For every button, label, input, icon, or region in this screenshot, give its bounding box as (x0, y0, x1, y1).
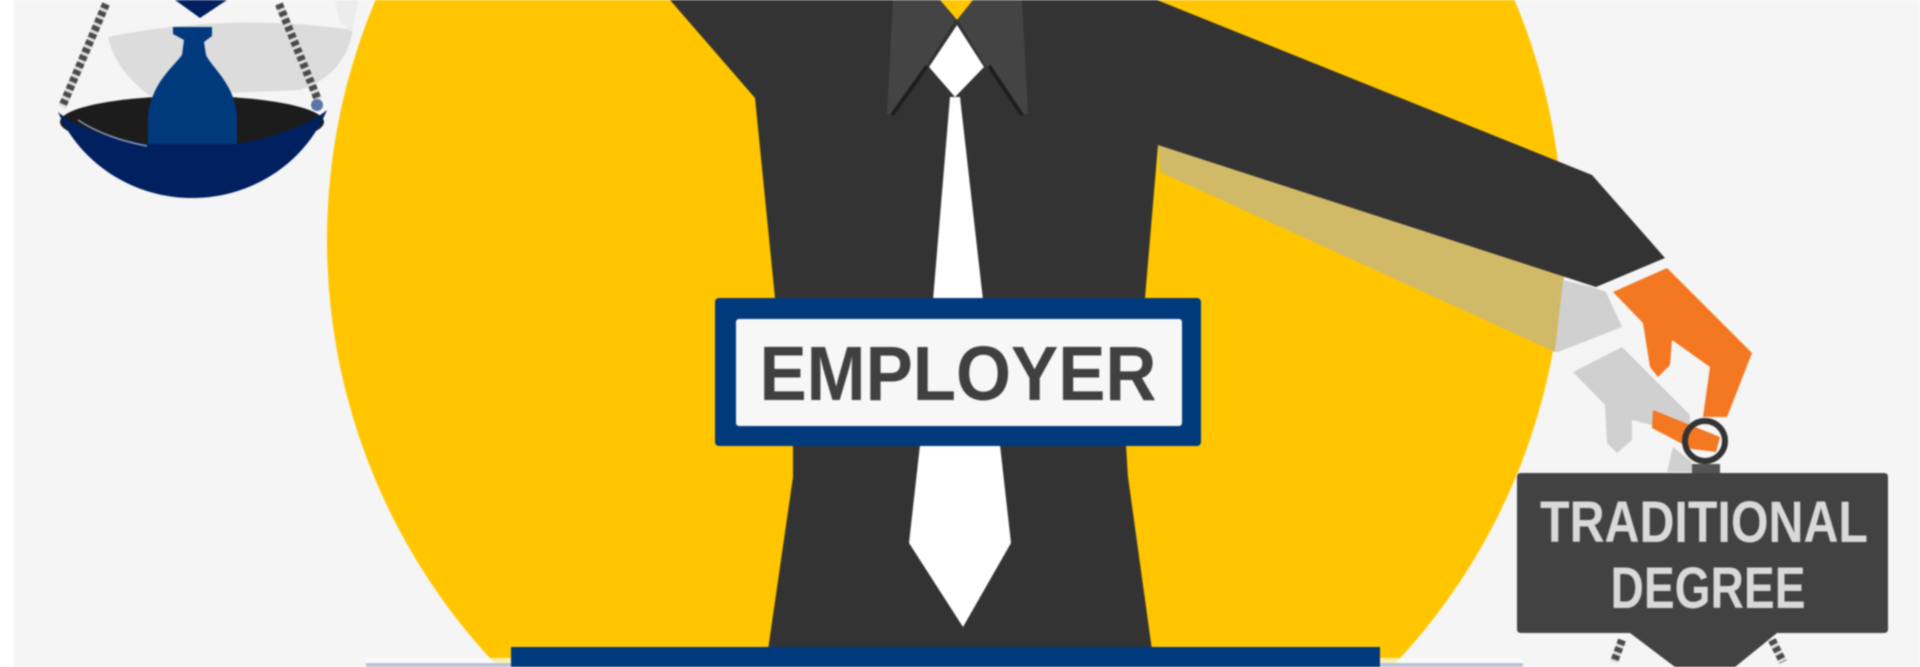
chain hook (311, 99, 323, 111)
podium (511, 647, 1380, 667)
ring (1685, 421, 1725, 461)
hanging knot (175, 0, 227, 18)
tie knot (929, 25, 984, 97)
base line (366, 663, 1523, 667)
sign label: EMPLOYER (760, 331, 1156, 417)
employer suit (670, 0, 1665, 650)
shirt tip (940, 0, 973, 20)
pan inner rim (60, 96, 324, 148)
traditional degree tag (1517, 473, 1888, 667)
pan chain right (279, 4, 318, 100)
tag line two: DEGREE (1610, 556, 1806, 621)
orange hand (1613, 268, 1752, 452)
scale pan shadow (108, 22, 353, 96)
collar shadows (892, 66, 1022, 115)
pan bowl (58, 110, 327, 198)
arm shadow on circle (1158, 140, 1565, 352)
left scale: money bag in pan (58, 0, 358, 198)
pan chain left (62, 4, 106, 107)
wrist shadow below thumb (1667, 447, 1692, 472)
degree tag chains (1614, 640, 1783, 662)
faint shadow upper right (335, 0, 358, 32)
hand shadow (1573, 347, 1690, 453)
tag body (1517, 473, 1888, 667)
pan highlight (78, 120, 147, 146)
money bag (148, 27, 237, 148)
tie (909, 97, 1011, 627)
sign panel (736, 319, 1182, 426)
base line glow (366, 658, 1523, 663)
sign frame (715, 298, 1201, 446)
collar right (958, 0, 1028, 114)
yellow circle (327, 0, 1563, 667)
fingers (1613, 268, 1752, 417)
thumb (1652, 410, 1720, 452)
collar left (887, 0, 955, 114)
ring link (1692, 464, 1720, 473)
sleeve cuff shadow (1555, 280, 1622, 352)
employer sign (715, 298, 1201, 446)
